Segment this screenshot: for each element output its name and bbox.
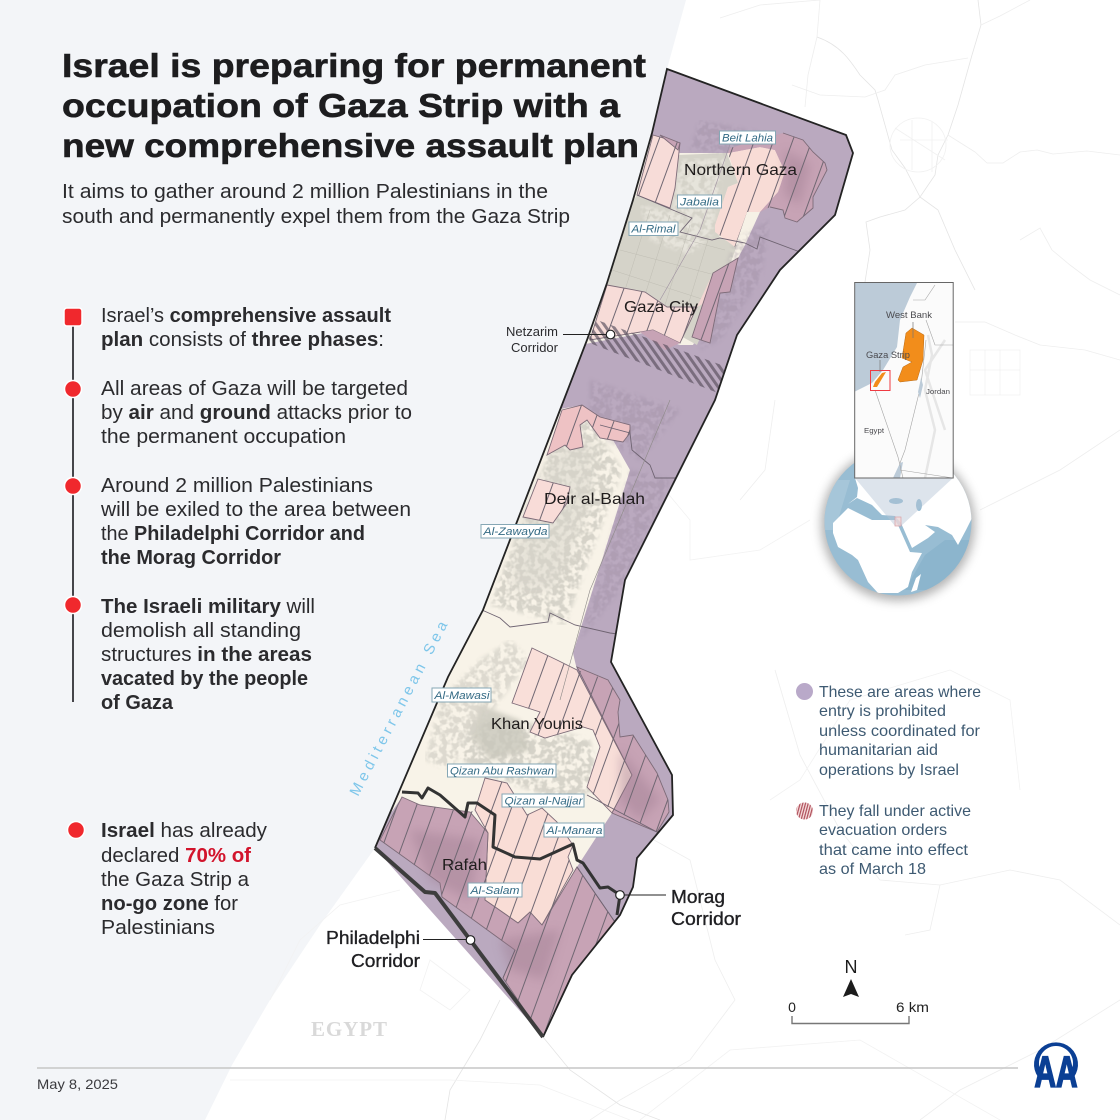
locator globe [821, 440, 985, 601]
callout: Netzarim Corridor: Netzarim [506, 324, 558, 339]
neighbourhood labels [432, 131, 776, 897]
Morag Corridor line [402, 788, 620, 915]
inset: red location square [870, 370, 890, 390]
callout: Philadelphi Corridor [326, 928, 475, 971]
text: 70 percent no-go zone: Palestinians [101, 917, 215, 939]
globe: Africa [833, 508, 922, 593]
inset: Gaza [873, 372, 886, 387]
Philadelphi Corridor line [375, 848, 543, 1037]
callout: Philadelphi Corridor: Philadelphi [326, 928, 420, 948]
cream open areas [580, 134, 785, 345]
inset: labels [864, 310, 950, 435]
base restricted zone: purple [375, 69, 853, 1037]
subtitle [62, 181, 570, 228]
globe: Madagascar [911, 574, 921, 592]
legend: evacuation orders [796, 802, 971, 878]
inset: labels: West Bank [886, 310, 932, 321]
title: Israel is preparing for permanent [62, 48, 646, 85]
legend: evacuation orders: evacuation orders [819, 822, 947, 839]
zone: dark purple urban smudges [580, 120, 770, 640]
Strip outline [375, 69, 853, 1037]
logo: AA: AA [1034, 1048, 1078, 1096]
label: Al-Rimal: Al-Rimal [630, 224, 676, 236]
callout: Morag Corridor: Corridor [671, 909, 741, 929]
legend: evacuation orders: that came into effect [819, 842, 969, 859]
text: three phases intro: plan consists of three phases: [101, 329, 384, 351]
text: phase one [101, 378, 412, 448]
text: phase three: demolish all standing [101, 620, 301, 642]
text: phase three: The Israeli military will [101, 596, 315, 618]
callout: Netzarim Corridor: Corridor [511, 340, 559, 355]
sea background [0, 0, 686, 1120]
scale bar: 6 km [896, 999, 929, 1015]
globe: Caspian Sea [916, 499, 922, 511]
text: phase two: the Morag Corridor [101, 547, 281, 569]
inset locator map [854, 282, 953, 478]
text: phase one: All areas of Gaza will be targeted [101, 378, 408, 400]
title [62, 48, 646, 165]
bullet: 70 percent [68, 822, 84, 838]
legend: prohibited areas [796, 683, 981, 779]
sea label: Mediterranean Sea [346, 616, 453, 799]
timeline dot 1 [64, 380, 82, 398]
title: new comprehensive assault plan [62, 128, 639, 165]
city labels: Khan Younis [491, 716, 583, 733]
text: phase one: the permanent occupation [101, 426, 346, 448]
inset: West Bank [898, 328, 924, 382]
globe: Eurasia [848, 474, 972, 548]
callout: Philadelphi Corridor: Corridor [351, 951, 420, 971]
legend: prohibited areas: operations by Israel [819, 762, 959, 779]
date: May 8, 2025 [37, 1076, 118, 1092]
legend: evacuation orders: They fall under active [819, 803, 971, 820]
subtitle: It aims to gather around 2 million Palestinians in the [62, 181, 548, 203]
city labels: Gaza City [624, 299, 698, 316]
label: Qizan Abu Rashwan: Qizan Abu Rashwan [450, 766, 554, 778]
inset: labels: Egypt [864, 426, 885, 435]
text: 70 percent no-go zone [101, 820, 267, 939]
zone boundaries [482, 130, 800, 978]
legend: prohibited areas: entry is prohibited [819, 703, 946, 720]
text: phase three: structures in the areas [101, 644, 312, 666]
timeline square marker [64, 308, 82, 326]
dark smudges in evacuation zones [410, 150, 810, 980]
city labels: Deir al-Balah [544, 491, 645, 508]
text: phase three: vacated by the people [101, 668, 308, 690]
inset: labels: Jordan [926, 387, 950, 396]
text: phase two: will be exiled to the area between [100, 499, 411, 521]
text: phase two: the Philadelphi Corridor and [101, 523, 365, 545]
legend: prohibited areas: humanitarian aid [819, 742, 938, 759]
legend: prohibited areas: These are areas where [819, 684, 981, 701]
text: 70 percent no-go zone: no-go zone for [101, 893, 238, 915]
cone from inset to globe [855, 478, 953, 526]
legend: prohibited areas: unless coordinated for [819, 723, 981, 740]
text: phase three [101, 596, 315, 714]
callout: Morag Corridor: Morag [671, 887, 725, 907]
inset: labels: Gaza Strip [866, 350, 910, 361]
evacuation zones: light pink [475, 135, 785, 925]
north arrow [843, 957, 859, 997]
logo: AA [1034, 1042, 1078, 1096]
country label: Egypt: EGYPT [311, 1017, 387, 1041]
text: 70 percent no-go zone: the Gaza Strip a [101, 869, 250, 891]
timeline [64, 308, 82, 702]
evacuation zones: dark pink over restricted area [380, 133, 827, 1037]
callout: Morag Corridor [616, 887, 741, 929]
label: Al-Zawayda: Al-Zawayda [482, 526, 548, 538]
text: 70 percent no-go zone: Israel has already [101, 820, 267, 842]
timeline dot 3 [64, 596, 82, 614]
legend: evacuation orders: as of March 18 [819, 861, 926, 878]
label: Beit Lahia: Beit Lahia [722, 132, 773, 144]
globe: Black Sea [889, 498, 903, 504]
Gaza City street grid [612, 210, 725, 315]
city labels: Rafah [442, 857, 487, 874]
text: three phases intro [101, 305, 391, 351]
north arrow: N [844, 957, 858, 977]
subtitle: south and permanently expel them from the Gaza Strip [62, 206, 570, 228]
text: phase two: Around 2 million Palestinians [101, 475, 373, 497]
label: Jabalia: Jabalia [679, 196, 719, 208]
scale bar: 0 [788, 999, 796, 1015]
built-up areas [425, 153, 738, 800]
hatched evacuation lines [380, 133, 827, 1037]
map: Gaza Strip [365, 69, 853, 1037]
city labels [442, 162, 797, 874]
callout: Netzarim Corridor [506, 324, 615, 355]
text: phase three: of Gaza [101, 692, 174, 714]
text: three phases intro: Israel’s comprehensive assault [101, 305, 391, 327]
timeline dot 2 [64, 478, 82, 494]
surrounding road network [230, 0, 1120, 1120]
label: Qizan al-Najjar: Qizan al-Najjar [504, 796, 584, 808]
label: Al-Manara: Al-Manara [545, 825, 602, 837]
north speckle highlights [640, 158, 725, 255]
text: phase two [100, 475, 411, 569]
label: Al-Salam: Al-Salam [469, 885, 520, 897]
Netzarim corridor hatch band [587, 320, 727, 393]
title: occupation of Gaza Strip with a [62, 88, 620, 125]
city labels: Northern Gaza [684, 162, 797, 179]
globe location marker [895, 517, 901, 526]
label: Al-Mawasi: Al-Mawasi [433, 690, 490, 702]
text: phase one: by air and ground attacks prior to [101, 402, 412, 424]
scale bar [788, 999, 929, 1024]
footer line [37, 1067, 1018, 1069]
text: 70 percent no-go zone: declared 70% of [101, 845, 251, 867]
